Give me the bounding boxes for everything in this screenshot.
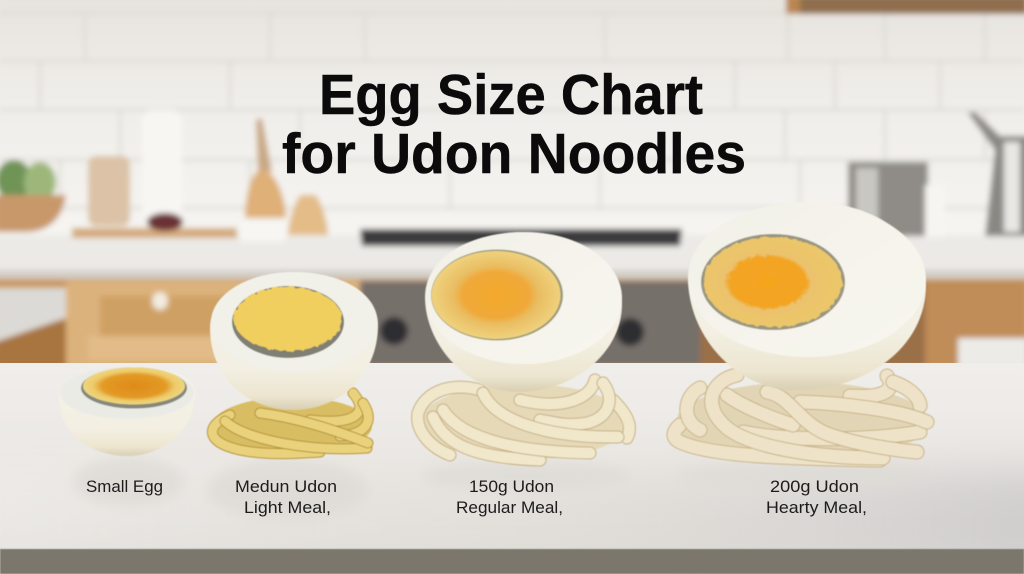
medium egg [210,272,378,410]
kitchen background [0,0,1024,369]
200g egg [688,202,926,390]
label: medium udon: Medun Udon [235,477,337,496]
title: for Udon Noodles [282,122,746,186]
150g noodles [418,380,629,460]
label: 150g udon: Regular Meal, [456,498,563,517]
label: 200g udon: 200g Udon [770,477,859,496]
medium noodles [212,393,372,455]
small egg [59,367,195,456]
labels [86,477,867,517]
title: Egg Size Chart [319,63,703,127]
marble counter [0,363,1024,574]
label: small egg: Small Egg [86,477,163,496]
150g egg [425,232,622,392]
counter reflections [73,458,927,520]
200g noodles [674,375,928,462]
label: 200g udon: Hearty Meal, [766,498,867,517]
title [282,63,746,186]
label: 150g udon: 150g Udon [469,477,554,496]
label: 200g udon [766,477,867,517]
label: medium udon [235,477,337,517]
label: 150g udon [456,477,563,517]
label: medium udon: Light Meal, [244,498,331,517]
